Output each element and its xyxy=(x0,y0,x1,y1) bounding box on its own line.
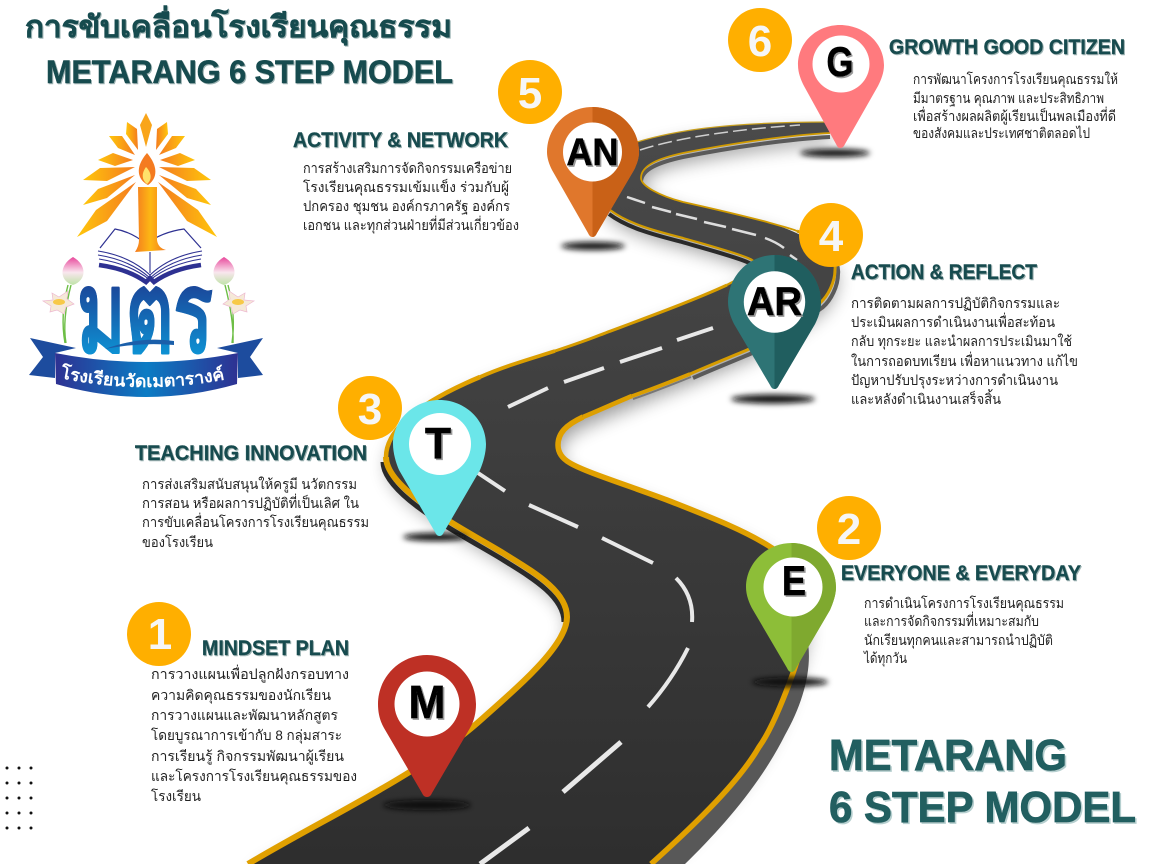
big model title: 6 STEP MODEL xyxy=(829,783,1136,832)
text 6: เพื่อสร้างผลผลิตผู้เรียนเป็นพลเมืองที่ดี xyxy=(913,107,1116,125)
text 1: โดยบูรณาการเข้ากับ 8 กลุ่มสาระ xyxy=(151,727,342,744)
step 3: teaching innovation xyxy=(135,376,486,550)
logo ribbon: โรงเรียนวัดเมตารางค์ xyxy=(62,363,224,388)
text 3: ของโรงเรียน xyxy=(142,534,213,550)
number badge 1 xyxy=(127,602,191,666)
text 1: การวางแผนและพัฒนาหลักสูตร xyxy=(151,707,338,724)
text 1 xyxy=(151,665,357,804)
number badge 3: 3 xyxy=(358,385,382,434)
text 4 xyxy=(851,295,1078,407)
text 2: นักเรียนทุกคนและสามารถนำปฏิบัติ xyxy=(864,632,1053,649)
text 1: และโครงการโรงเรียนคุณธรรมของ xyxy=(151,768,357,785)
school logo xyxy=(29,113,263,397)
step 5: activity and network xyxy=(293,60,639,250)
title: การขับเคลื่อนโรงเรียนคุณธรรม xyxy=(25,5,452,46)
number badge 6 xyxy=(728,8,792,72)
step 4: action and reflect xyxy=(728,203,1078,407)
text 5: โรงเรียนคุณธรรมเข้มแข็ง ร่วมกับผู้ xyxy=(303,178,509,196)
text 1: การวางแผนเพื่อปลูกฝังกรอบทาง xyxy=(151,665,349,683)
pin shadow 3 xyxy=(403,533,467,541)
text 1: โรงเรียน xyxy=(151,788,201,804)
number badge 2 xyxy=(817,496,881,560)
number badge 4 xyxy=(799,203,863,267)
winding road xyxy=(248,122,838,864)
text 6: การพัฒนาโครงการโรงเรียนคุณธรรมให้ xyxy=(913,71,1118,88)
pin shadow 6 xyxy=(800,149,870,157)
heading 5: ACTIVITY & NETWORK xyxy=(293,129,508,152)
pin AR: AR xyxy=(747,280,802,324)
number badge 2: 2 xyxy=(837,505,861,554)
title xyxy=(25,5,453,90)
step 6: growth good citizen xyxy=(728,8,1125,157)
text 6: ของสังคมและประเทศชาติตลอดไป xyxy=(913,125,1090,141)
pin shadow 4 xyxy=(731,394,815,404)
text 4: กลับ ทุกระยะ และนำผลการประเมินมาใช้ xyxy=(851,333,1072,350)
number badge 5: 5 xyxy=(518,69,542,118)
text 1: ความคิดคุณธรรมของนักเรียน xyxy=(151,687,331,704)
text 5: การสร้างเสริมการจัดกิจกรรมเครือข่าย xyxy=(303,160,512,176)
number badge 1: 1 xyxy=(148,610,172,659)
logo lotus flowers xyxy=(43,257,254,343)
text 3: การส่งเสริมสนับสนุนให้ครูมี นวัตกรรม xyxy=(142,476,357,493)
pin T xyxy=(393,400,486,536)
logo wordmark xyxy=(77,250,213,377)
heading 6: GROWTH GOOD CITIZEN xyxy=(889,36,1125,59)
pin G xyxy=(798,25,884,148)
pin G: G xyxy=(826,38,854,85)
pin M xyxy=(378,655,476,797)
pin AN xyxy=(547,107,639,237)
text 4: ประเมินผลการดำเนินงานเพื่อสะท้อน xyxy=(851,313,1055,330)
big model title xyxy=(829,731,1136,832)
number badge 5 xyxy=(498,60,562,124)
title: METARANG 6 STEP MODEL xyxy=(46,54,453,90)
logo ribbon xyxy=(29,338,263,397)
pin E xyxy=(746,543,836,672)
logo book xyxy=(98,229,202,282)
text 4: ในการถอดบทเรียน เพื่อหาแนวทาง แก้ไข xyxy=(851,352,1078,369)
text 2: การดำเนินโครงการโรงเรียนคุณธรรม xyxy=(864,595,1064,612)
text 4: การติดตามผลการปฏิบัติกิจกรรมและ xyxy=(851,295,1060,311)
pin T: T xyxy=(425,419,451,468)
text 4: และหลังดำเนินงานเสร็จสิ้น xyxy=(851,389,1001,407)
pin shadow 1 xyxy=(383,800,471,810)
logo wordmark: มตร xyxy=(77,250,213,377)
centre line dashes xyxy=(478,125,800,864)
number badge 6: 6 xyxy=(748,17,772,66)
pin AR xyxy=(728,255,821,389)
text 6 xyxy=(913,71,1118,141)
heading 3: TEACHING INNOVATION xyxy=(135,442,367,465)
text 2 xyxy=(863,595,1064,667)
pin E: E xyxy=(782,557,806,604)
logo rays xyxy=(77,113,217,237)
heading 2: EVERYONE & EVERYDAY xyxy=(841,562,1081,585)
text 2: และการจัดกิจกรรมที่เหมาะสมกับ xyxy=(864,612,1039,629)
text 5 xyxy=(303,160,519,234)
text 3: การสอน หรือผลการปฏิบัติที่เป็นเลิศ ใน xyxy=(142,494,359,511)
step 1: mindset plan xyxy=(127,602,476,810)
heading 1: MINDSET PLAN xyxy=(202,637,349,660)
pin AN: AN xyxy=(566,132,618,174)
step 2: everyone and everyday xyxy=(746,496,1081,686)
number badge 3 xyxy=(338,376,402,440)
text 4: ปัญหาปรับปรุงระหว่างการดำเนินงาน xyxy=(851,372,1058,389)
number badge 4: 4 xyxy=(819,212,844,261)
text 1: การเรียนรู้ กิจกรรมพัฒนาผู้เรียน xyxy=(151,748,344,765)
text 6: มีมาตรฐาน คุณภาพ และประสิทธิภาพ xyxy=(913,90,1104,107)
text 5: ปกครอง ชุมชน องค์กรภาครัฐ องค์กร xyxy=(303,198,510,215)
text 5: เอกชน และทุกส่วนฝ่ายที่มีส่วนเกี่ยวข้อง xyxy=(303,216,519,234)
logo candle xyxy=(135,153,166,252)
pin M: M xyxy=(408,676,446,728)
text 2: ได้ทุกวัน xyxy=(863,650,907,667)
text 3: การขับเคลื่อนโครงการโรงเรียนคุณธรรม xyxy=(142,513,369,531)
decorative dots xyxy=(6,766,32,830)
heading 4: ACTION & REFLECT xyxy=(851,261,1037,284)
text 3 xyxy=(142,476,369,550)
pin shadow 2 xyxy=(752,678,828,686)
pin shadow 5 xyxy=(561,242,625,250)
big model title: METARANG xyxy=(829,731,1067,780)
